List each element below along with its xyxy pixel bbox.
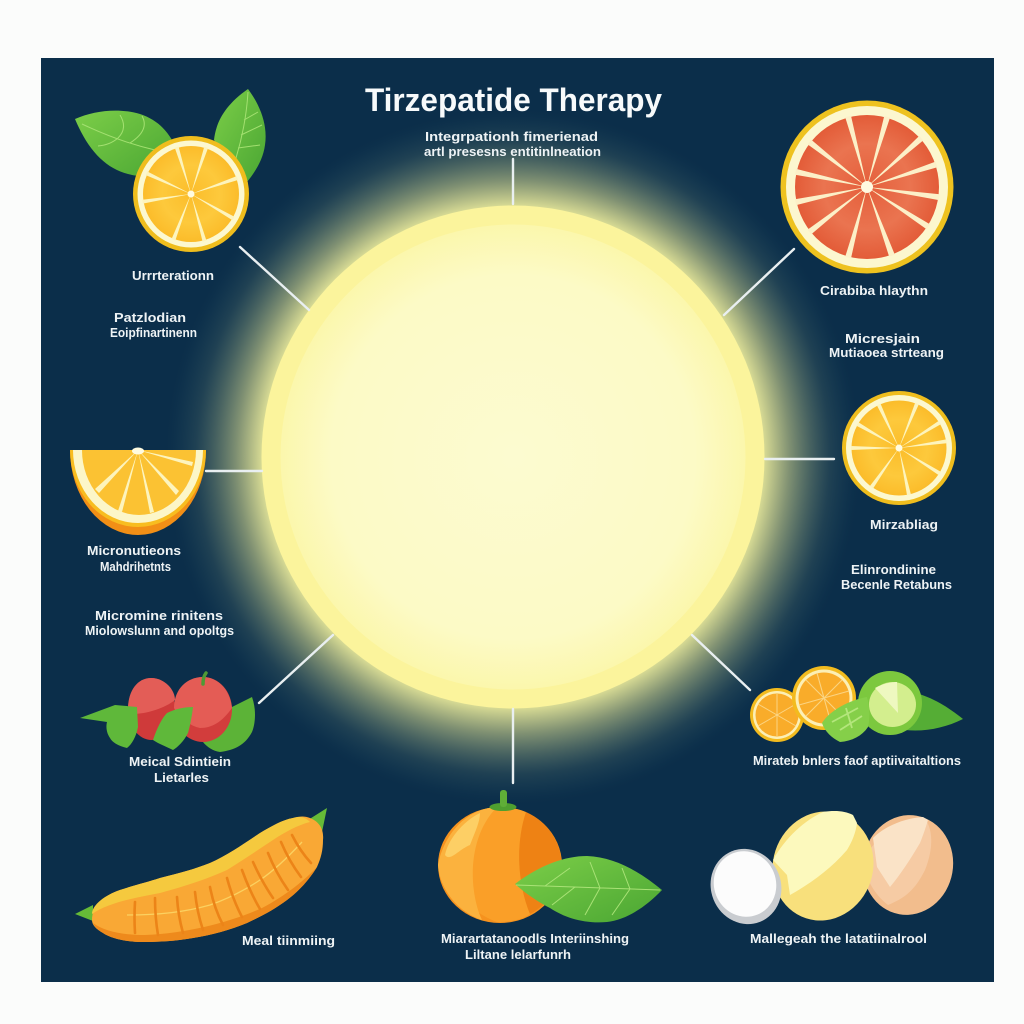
icon: half orange slice	[70, 448, 206, 535]
subtitle: Integrpationh fimerienad	[425, 130, 598, 144]
icon: eggs	[699, 798, 961, 935]
icon: orange with leaf	[438, 790, 662, 923]
label: micronutrients	[87, 543, 181, 574]
label: micromine: Miolowslunn and opoltgs	[85, 623, 234, 638]
label: endocrine: Becenle Retabuns	[841, 578, 952, 592]
icon: lemon slice with two leaves	[75, 89, 266, 252]
icon: right leaf	[214, 89, 266, 182]
connector lines	[206, 159, 834, 783]
label: circadian rhythm: Cirabiba hlaythn	[820, 284, 928, 298]
label: top left secondary: Eoipfinartinenn	[110, 326, 197, 340]
label: endocrine: Elinrondinine	[851, 563, 936, 577]
label: micronutrients: Mahdrihetnts	[100, 560, 171, 574]
central glowing circle	[163, 107, 863, 807]
label: micronutrients: Micronutieons	[87, 543, 181, 558]
subtitle: artl presesns entitinlneation	[424, 145, 601, 159]
icon: left leaf	[75, 111, 172, 178]
label: metabolic: Mirzabliag	[870, 518, 938, 532]
label: top left secondary	[110, 310, 197, 340]
label: bottom center	[441, 932, 629, 962]
label: top left: Urrrterationn	[132, 269, 214, 283]
label: bottom center: Liltane lelarfunrh	[465, 948, 571, 962]
icon: red apples with leaves	[80, 673, 255, 752]
subtitle	[424, 130, 601, 159]
label: bottom center: Miarartatanoodls Interiinshing	[441, 932, 629, 946]
icon: squash	[75, 808, 327, 942]
label: bottom right: Mallegeah the latatiinalrool	[750, 932, 927, 946]
label: micromine: Micromine rinitens	[95, 608, 223, 623]
label: top left secondary: Patzlodian	[114, 310, 186, 325]
label: endocrine	[841, 563, 952, 592]
label: microgain	[829, 331, 944, 360]
icon: lemon slice right	[842, 391, 956, 505]
icon: citrus and lime group	[750, 666, 963, 742]
label: micromine	[85, 608, 234, 638]
label: microgain: Mutiaoea strteang	[829, 346, 944, 360]
label: bottom right upper: Mirateb bnlers faof aptiivaitaltions	[753, 754, 961, 768]
label: meal timing: Meal tiinmiing	[242, 934, 335, 948]
label: medical: Lietarles	[154, 771, 209, 785]
icon: grapefruit slice	[780, 100, 954, 274]
title: Tirzepatide Therapy	[365, 82, 662, 118]
label: medical	[129, 754, 231, 785]
label: microgain: Micresjain	[845, 331, 920, 346]
label: medical: Meical Sdintiein	[129, 754, 231, 769]
